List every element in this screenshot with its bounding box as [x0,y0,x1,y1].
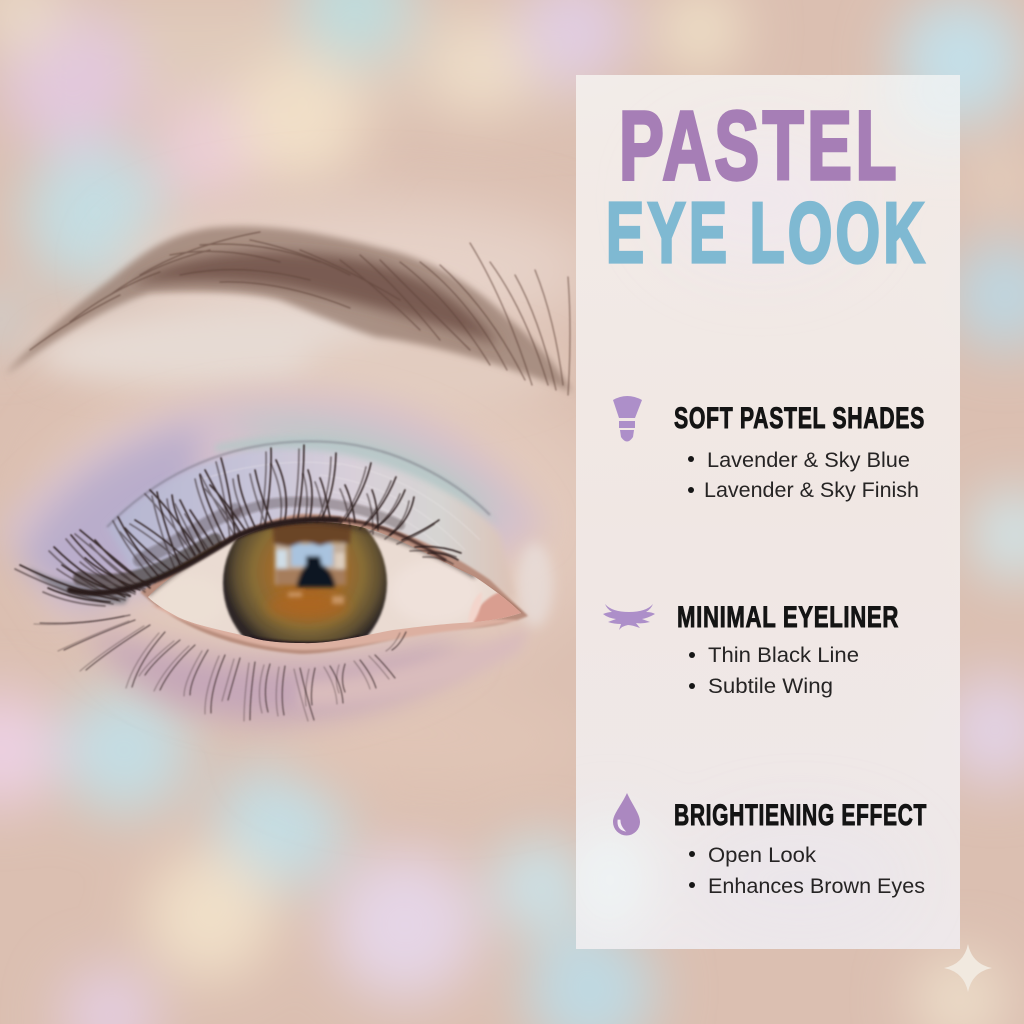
heading: BRIGHTIENING EFFECT [674,799,927,832]
reflection window [272,522,352,604]
section: brightening effect [613,793,927,898]
icon: sparkle star [944,944,992,992]
panel: text card [570,40,1010,949]
upper lashes [20,445,461,602]
pink rim around eye [140,514,528,654]
lower lashes [40,615,406,720]
bullet list: Enhances Brown Eyes [708,874,925,898]
icon: lashes wing [603,604,655,630]
bullet list [689,643,859,698]
upper lash band [70,502,445,593]
eye photo area [0,200,620,790]
bullet list: Open Look [708,843,816,867]
bullet list: Lavender & Sky Blue [707,448,910,472]
icon: droplet [613,793,640,836]
bullet list: Thin Black Line [708,643,859,667]
icon: makeup brush [613,396,642,442]
shimmer lines [204,474,222,479]
iris [221,522,389,644]
bullet list [688,448,919,502]
bullet list [689,843,925,898]
section: minimal eyeliner [603,601,899,698]
skin around eye [120,190,576,786]
crease line [107,441,490,527]
bullet list: Subtile Wing [708,674,833,698]
eyelid [114,449,500,588]
brow bone highlight [36,304,529,394]
section: soft pastel shades [613,396,925,502]
heading: SOFT PASTEL SHADES [674,402,925,435]
title [606,91,928,281]
eyeball [148,522,521,644]
title: PASTEL [619,91,900,200]
eyebrow [5,226,572,395]
heading: MINIMAL EYELINER [677,601,899,634]
outer smudge wing [28,567,135,604]
bullet list: Lavender & Sky Finish [704,478,919,502]
upper lid shadow [148,522,477,598]
eyeshadow wash [0,394,545,721]
